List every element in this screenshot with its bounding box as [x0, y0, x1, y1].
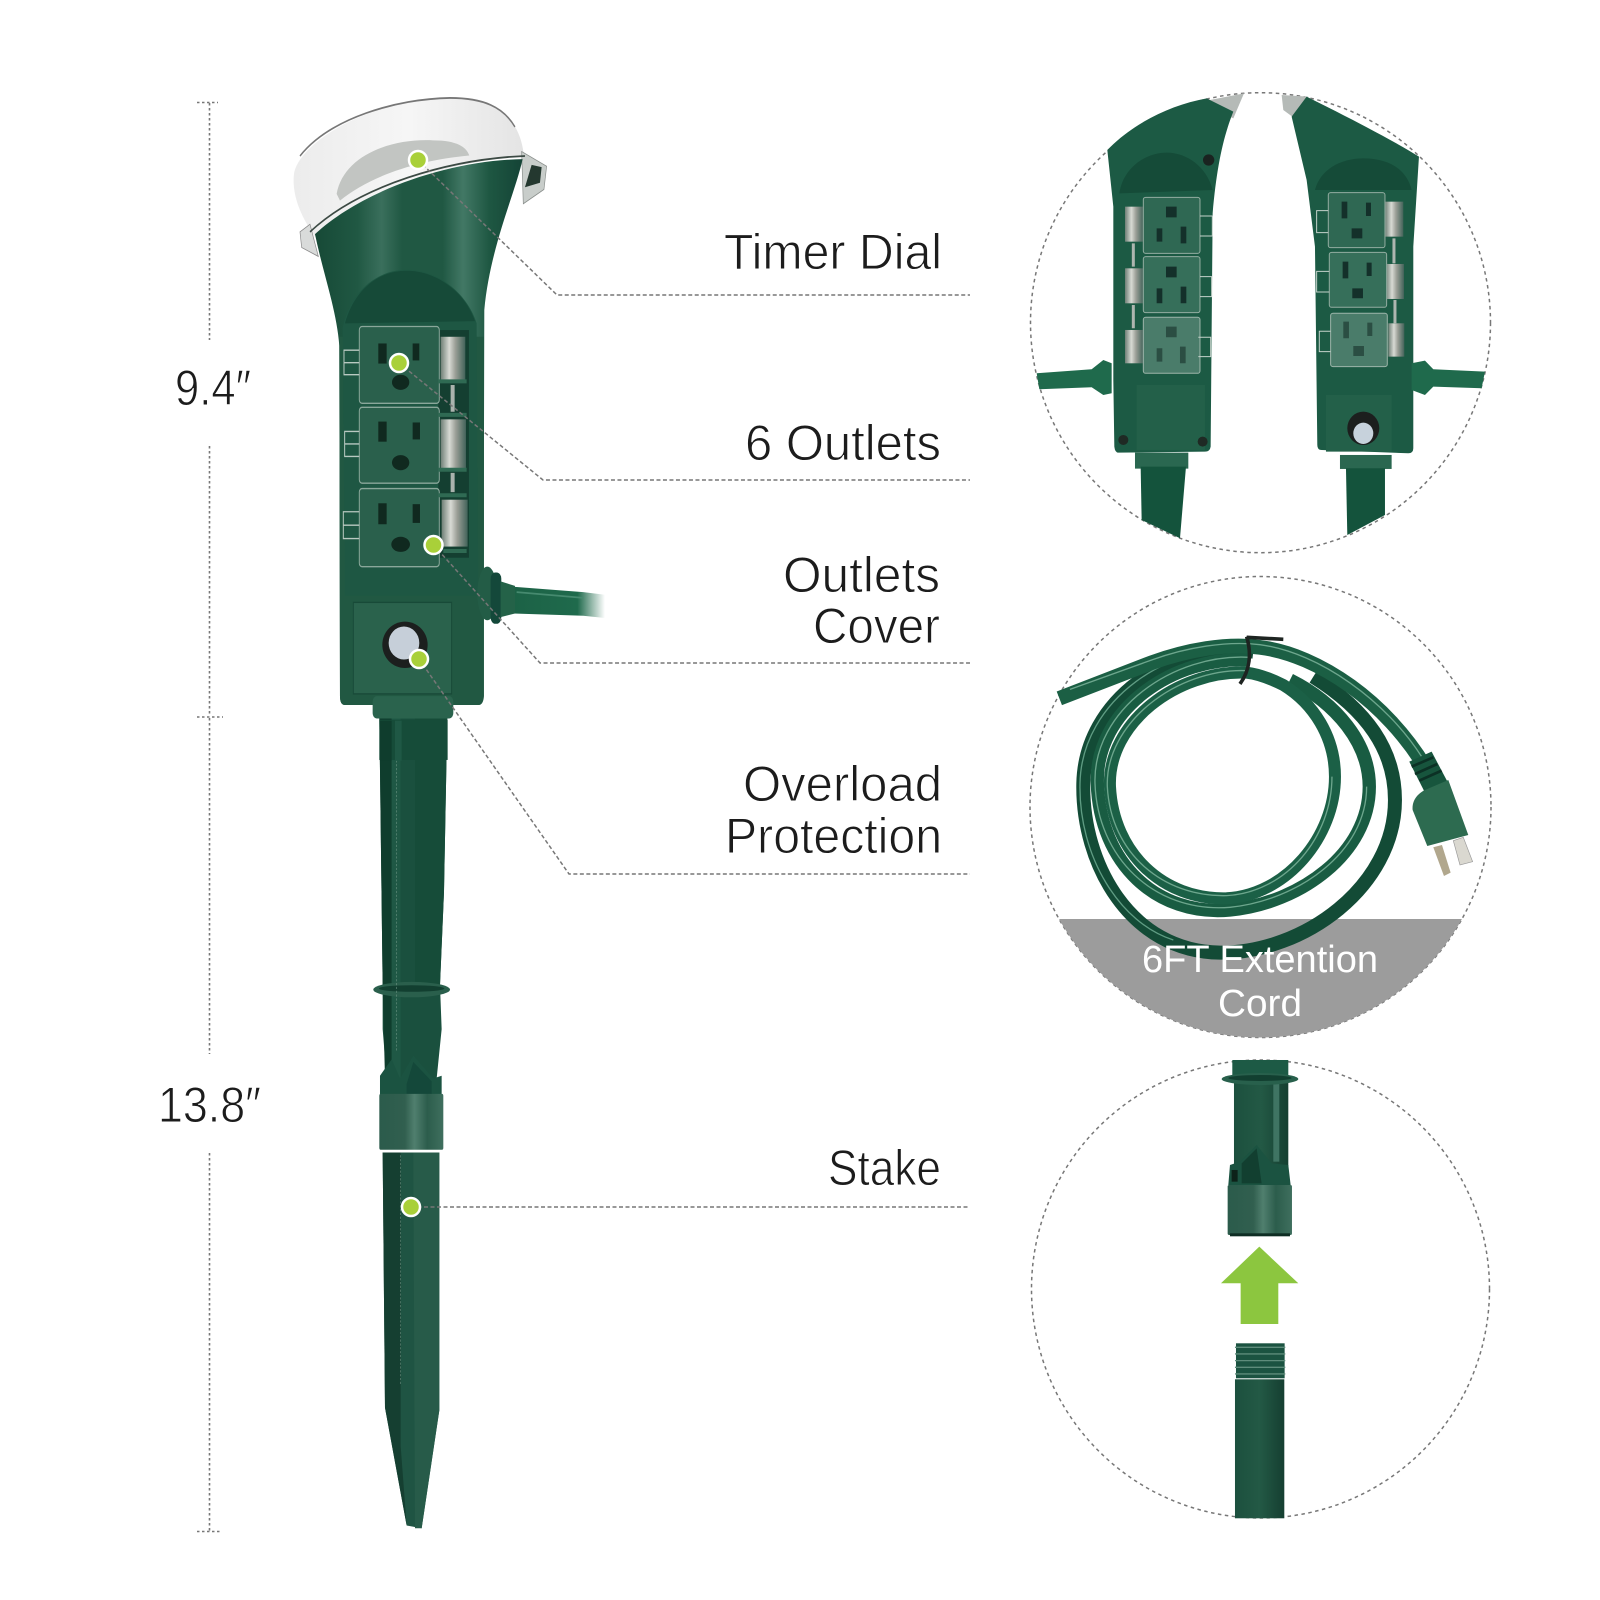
dimension line: 13.8 inch: [158, 718, 261, 1532]
inner loop: [1110, 673, 1335, 898]
leader line: overload protection: [419, 659, 970, 874]
reset button: [382, 622, 428, 668]
leader line: outlets cover: [434, 545, 970, 663]
overload protection box: [353, 602, 452, 694]
stake collar: [373, 696, 453, 761]
label: Timer Dial: Timer Dial: [724, 224, 942, 280]
hinge channel: [438, 330, 469, 558]
grey caption band: [1059, 919, 1462, 1038]
hinge pins: [447, 385, 459, 492]
funnel body: [315, 159, 523, 705]
timer dial: [337, 140, 469, 201]
leader line: timer dial: [418, 160, 970, 295]
caption: Cord: [1218, 983, 1302, 1025]
outlet 1 with cover: [344, 327, 467, 403]
marker: stake: [402, 1198, 420, 1216]
upper stake section: [1222, 1060, 1298, 1236]
label: 6 Outlets: 6 Outlets: [745, 415, 941, 471]
green arrow pointing up: [1221, 1247, 1298, 1324]
tail with plug lead: [1059, 646, 1425, 767]
right view of the unit: [1282, 95, 1485, 535]
lid hinge: [522, 152, 547, 204]
lower housing: [339, 337, 484, 705]
outlet 2 with cover: [345, 407, 467, 483]
panel: front and back views circle: [1030, 93, 1490, 553]
left view of the unit: [1037, 93, 1244, 538]
threaded lower stake section: [1235, 1343, 1285, 1518]
stake (lower part of the product): [373, 716, 450, 1528]
marker: outlet: [390, 354, 408, 372]
label: Overload Protection: Protection: [725, 808, 942, 864]
dimension value 9.4: 9.4″: [175, 360, 251, 416]
outer loop: [1083, 651, 1395, 953]
label: Overload Protection: Overload: [743, 756, 942, 812]
cable tie: [1240, 637, 1283, 684]
panel: stake assembly circle: [1032, 1060, 1490, 1518]
label: Outlets Cover: Cover: [813, 598, 940, 654]
arched outlet panel: [343, 270, 478, 596]
label: Stake: Stake: [828, 1140, 941, 1196]
label: Overload Protection: [725, 756, 942, 864]
label: Outlets Cover: [783, 547, 940, 654]
outlet 3 with cover: [343, 489, 468, 567]
plug: [1409, 752, 1473, 876]
dimension value 13.8: 13.8″: [158, 1077, 261, 1133]
marker: overload protection: [410, 650, 428, 668]
coiled cord: [1059, 637, 1473, 953]
label: Outlets Cover: Outlets: [783, 547, 940, 603]
leader line: 6 outlets: [399, 363, 970, 480]
marker: outlets cover: [424, 536, 442, 554]
power stake body with timer dial and outlets: [294, 98, 605, 761]
caption: [1142, 939, 1378, 1025]
panel: 6FT extension cord circle: [1030, 576, 1492, 1044]
dimension line: 9.4 inch: [175, 102, 251, 717]
cord stub with strain relief: [477, 567, 605, 624]
clear timer dial lid: [294, 98, 524, 239]
leader line: stake: [411, 1206, 970, 1208]
caption: 6FT Extention: [1142, 939, 1378, 981]
middle loop: [1097, 660, 1369, 911]
marker: timer dial: [409, 151, 427, 169]
